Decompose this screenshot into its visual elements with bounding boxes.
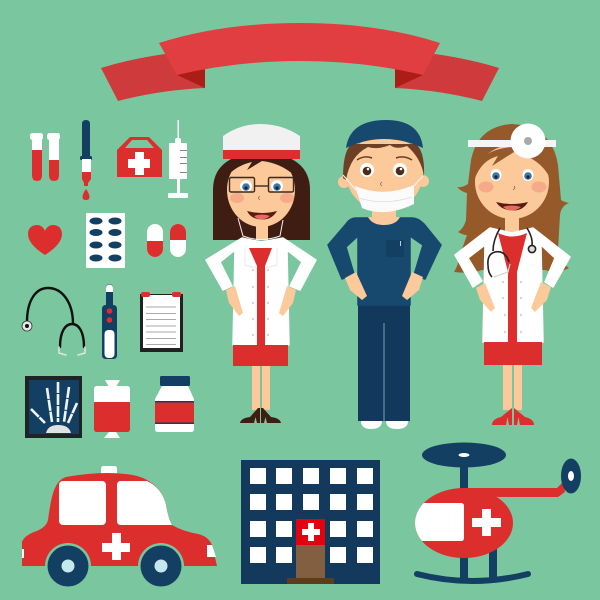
hospital sign and door xyxy=(287,519,334,584)
character: surgeon xyxy=(328,120,441,429)
helicopter xyxy=(410,442,581,581)
icon: syringe xyxy=(168,120,188,198)
surgeon hands xyxy=(345,272,423,300)
icon: capsules xyxy=(147,224,186,257)
surgeon scrubs top xyxy=(328,218,441,305)
nurse shoes xyxy=(240,408,281,423)
helicopter body xyxy=(415,488,513,558)
nurse coat buttons xyxy=(252,269,269,336)
helicopter window xyxy=(410,503,464,541)
icon: heart xyxy=(28,225,62,255)
hospital windows xyxy=(250,468,373,563)
ambulance windows xyxy=(59,481,172,525)
icon: dropper xyxy=(80,120,92,200)
helicopter rotor xyxy=(422,442,506,492)
doctor face xyxy=(475,145,550,219)
nurse hair xyxy=(213,152,310,240)
icon: blister pack xyxy=(86,213,125,268)
icon: first aid kit xyxy=(117,137,162,177)
nurse collar and mask straps xyxy=(238,218,283,268)
surgeon pants xyxy=(358,305,410,429)
surgeon head xyxy=(338,120,429,225)
icon: x-ray of hand xyxy=(25,376,82,438)
icon: thermometer xyxy=(102,284,117,359)
icon: blood bag xyxy=(94,380,130,438)
ambulance wheels xyxy=(45,543,184,589)
hospital building xyxy=(241,460,380,584)
doctor neck xyxy=(505,215,519,239)
helicopter tail rotor xyxy=(561,458,581,494)
nurse coat xyxy=(206,238,316,345)
helicopter tail xyxy=(460,482,565,497)
nurse hat xyxy=(223,124,300,159)
helicopter cross xyxy=(472,509,501,536)
doctor hair xyxy=(454,124,569,273)
doctor coat xyxy=(455,228,570,342)
ambulance cross xyxy=(102,533,130,560)
doctor stethoscope xyxy=(488,228,536,277)
doctor shoes xyxy=(492,408,534,425)
ambulance lights xyxy=(22,545,216,558)
helicopter skids xyxy=(417,545,528,581)
ambulance car xyxy=(22,466,217,589)
nurse face xyxy=(227,153,295,227)
doctor hands xyxy=(476,282,551,312)
surgical mask xyxy=(343,175,423,212)
nurse legs xyxy=(252,366,270,410)
doctor coat buttons xyxy=(502,281,522,333)
nurse hands xyxy=(226,286,296,316)
character: nurse with glasses xyxy=(206,124,316,423)
icon: medicine bottle xyxy=(155,376,194,432)
doctor dress xyxy=(484,233,542,365)
nurse dress xyxy=(233,248,288,366)
doctor legs xyxy=(503,365,522,410)
icon: stethoscope xyxy=(22,288,85,355)
icon: clipboard xyxy=(140,292,183,352)
nurse neck xyxy=(256,220,268,240)
banner ribbon xyxy=(101,23,499,101)
head mirror xyxy=(468,124,556,158)
icon: blood test tubes xyxy=(30,133,60,181)
character: doctor with head mirror xyxy=(454,124,570,425)
